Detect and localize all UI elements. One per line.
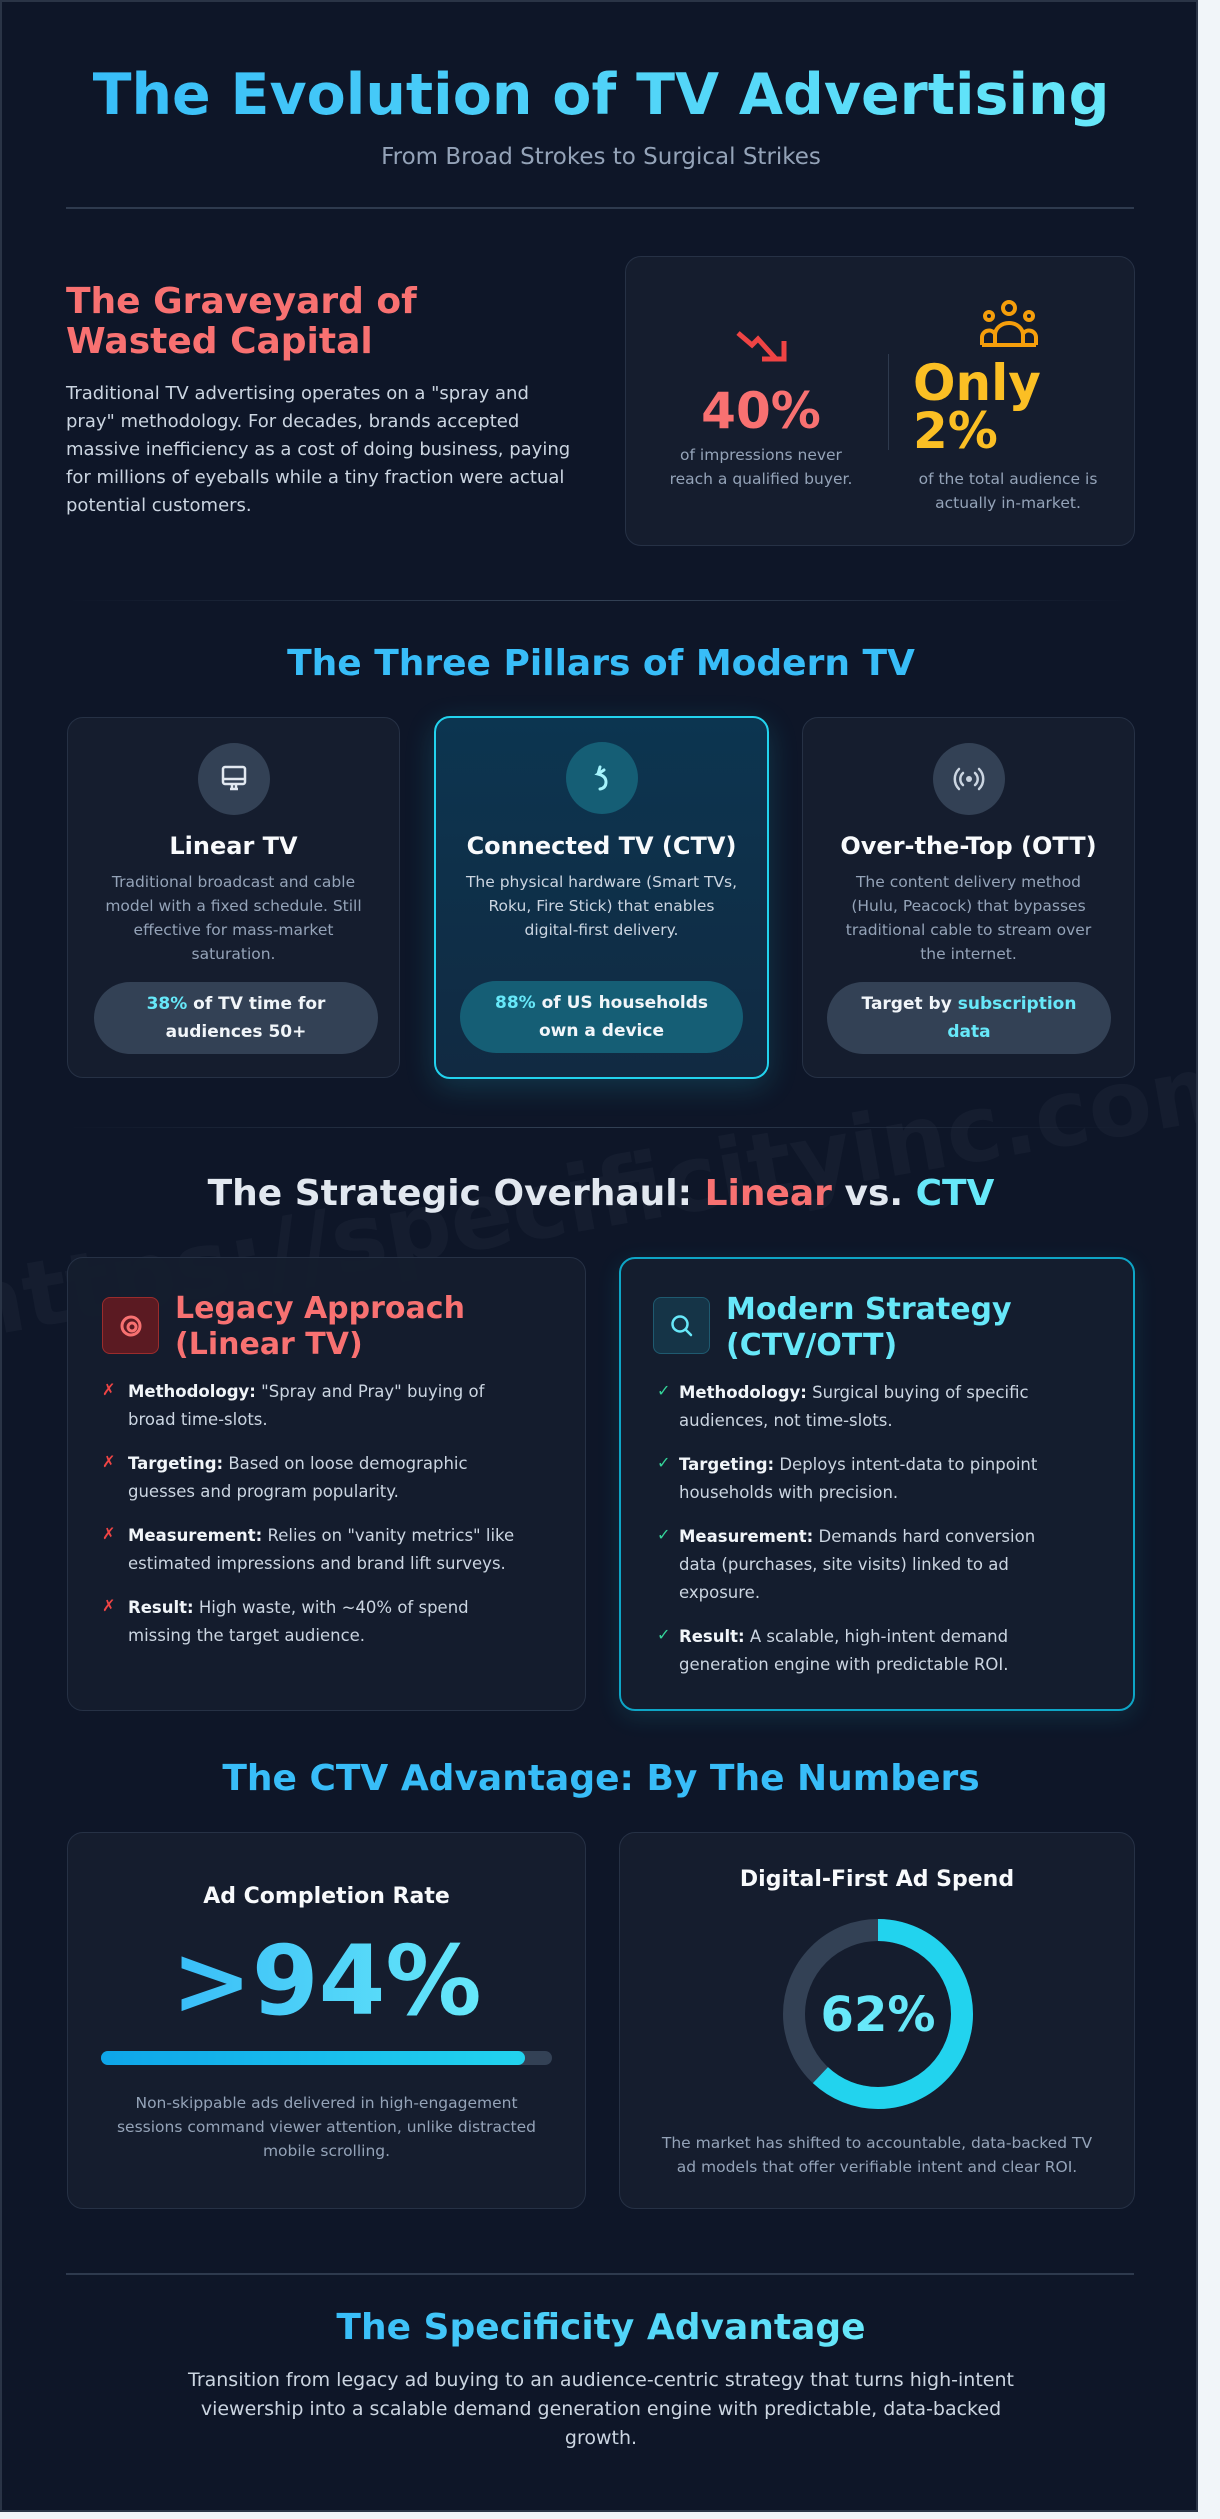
caption: Non-skippable ads delivered in high-engagement sessions command viewer attention, unlike distracted mobile scrolling.: [117, 2094, 536, 2160]
list: modern items: Measurement: Demands hard conversion data (purchases, site visits) linked to ad exposure.: [679, 1527, 1035, 1602]
icon: people: [980, 300, 1038, 347]
pill stat: 88% of US households: [495, 993, 708, 1013]
card title: Connected TV (CTV): [467, 832, 736, 860]
panel: legacy approach: [67, 1257, 586, 1711]
list: modern items: Result: A scalable, high-intent demand generation engine with predictable ROI.: [679, 1627, 1009, 1674]
stat: 40%: 40%: [701, 382, 821, 440]
donut chart: 62%: [821, 1987, 935, 2043]
list: legacy items: ✗: [102, 1380, 115, 1399]
list: legacy items: [102, 1380, 514, 1645]
pill stat: own a device: [539, 1021, 664, 1041]
icon: broadcast: [933, 743, 1005, 815]
graveyard text block: [66, 281, 570, 516]
heading: modern: Modern Strategy: [726, 1292, 1012, 1327]
list: legacy items: Targeting: Based on loose demographic guesses and program popularity.: [128, 1454, 468, 1501]
stat: only 2%: 2%: [913, 402, 998, 460]
icon: search: [653, 1297, 710, 1354]
stat: only 2%: [913, 354, 1041, 460]
list: legacy items: ✗: [102, 1596, 115, 1615]
list: legacy items: ✗: [102, 1452, 115, 1471]
icon: target: [102, 1297, 159, 1354]
list: modern items: [657, 1381, 1037, 1674]
pill stat: 38% of TV time for: [147, 994, 325, 1014]
paragraph: graveyard: Traditional TV advertising operates on a "spray and pray" methodology. For decades, brands accepted massive inefficiency as a cost of doing business, paying for millions of eyeballs while a tiny fraction were actual potential customers.: [66, 383, 570, 516]
card description: Traditional broadcast and cable model with a fixed schedule. Still effective for mass-market saturation.: [105, 873, 362, 963]
caption: The market has shifted to accountable, data-backed TV ad models that offer verifiable intent and clear ROI.: [662, 2134, 1092, 2176]
heading: strategic overhaul: The Strategic Overhaul: Linear vs. CTV: [208, 1173, 994, 1214]
pill stat: audiences 50+: [166, 1022, 306, 1042]
panel: ott: [802, 717, 1135, 1078]
heading: legacy: (Linear TV): [175, 1327, 363, 1362]
list: legacy items: Methodology: "Spray and Pray" buying of broad time-slots.: [128, 1382, 484, 1429]
heading: graveyard: The Graveyard of: [66, 281, 417, 322]
panel: connected tv: [434, 716, 769, 1079]
card title: Linear TV: [169, 832, 298, 860]
heading: legacy: Legacy Approach: [175, 1291, 465, 1326]
list: modern items: Targeting: Deploys intent-data to pinpoint households with precision.: [679, 1455, 1037, 1502]
stat: >94%: >94%: [171, 1925, 482, 2037]
pill stat: [94, 982, 378, 1054]
icon: trending down: [736, 331, 786, 362]
subtitle: From Broad Strokes to Surgical Strikes: [381, 144, 821, 170]
panel: completion rate: [67, 1832, 586, 2209]
panel: modern strategy: [619, 1257, 1135, 1711]
card description: The content delivery method (Hulu, Peacock) that bypasses traditional cable to stream over the internet.: [846, 873, 1091, 963]
heading: ctv advantage: The CTV Advantage: By The Numbers: [222, 1758, 980, 1799]
list: modern items: ✓: [657, 1381, 670, 1400]
caption: 2%: of the total audience is actually in-market.: [919, 470, 1097, 512]
heading: modern: [726, 1292, 1012, 1363]
card title: Over-the-Top (OTT): [840, 832, 1097, 860]
stat: only 2%: Only: [913, 354, 1041, 412]
stat title: Ad Completion Rate: [203, 1884, 450, 1909]
list: modern items: Methodology: Surgical buying of specific audiences, not time-slots.: [679, 1383, 1029, 1430]
pill stat: data: [947, 1022, 991, 1042]
caption: 40%: of impressions never reach a qualified buyer.: [670, 446, 852, 488]
stat card: waste: [625, 256, 1135, 546]
stat title: Digital-First Ad Spend: [740, 1867, 1014, 1892]
list: legacy items: Result: High waste, with ~40% of spend missing the target audience.: [128, 1598, 469, 1645]
heading: legacy: [175, 1291, 465, 1362]
closing paragraph: Transition from legacy ad buying to an audience-centric strategy that turns high-intent viewership into a scalable demand generation engine with predictable, data-backed growth.: [188, 2369, 1014, 2449]
panel: ad spend: [619, 1832, 1135, 2209]
icon: monitor: [198, 743, 270, 815]
heading: specificity advantage: The Specificity Advantage: [336, 2307, 866, 2348]
donut chart: [783, 1919, 973, 2109]
list: modern items: ✓: [657, 1453, 670, 1472]
list: modern items: ✓: [657, 1525, 670, 1544]
progress bar: [101, 2051, 552, 2065]
heading: three pillars: The Three Pillars of Modern TV: [287, 643, 915, 684]
list: legacy items: ✗: [102, 1524, 115, 1543]
pill stat: [827, 982, 1111, 1054]
heading: graveyard: [66, 281, 418, 362]
heading: graveyard: Wasted Capital: [66, 321, 373, 362]
pill stat: [460, 981, 743, 1053]
list: legacy items: Measurement: Relies on "vanity metrics" like estimated impressions and brand lift surveys.: [128, 1526, 514, 1573]
icon: plug: [566, 742, 638, 814]
title: The Evolution of TV Advertising: [93, 62, 1109, 128]
pill stat: Target by subscription: [862, 994, 1076, 1014]
panel: linear tv: [67, 717, 400, 1078]
card description: The physical hardware (Smart TVs, Roku, Fire Stick) that enables digital-first delivery.: [466, 873, 737, 939]
heading: modern: (CTV/OTT): [726, 1328, 897, 1363]
list: modern items: ✓: [657, 1625, 670, 1644]
